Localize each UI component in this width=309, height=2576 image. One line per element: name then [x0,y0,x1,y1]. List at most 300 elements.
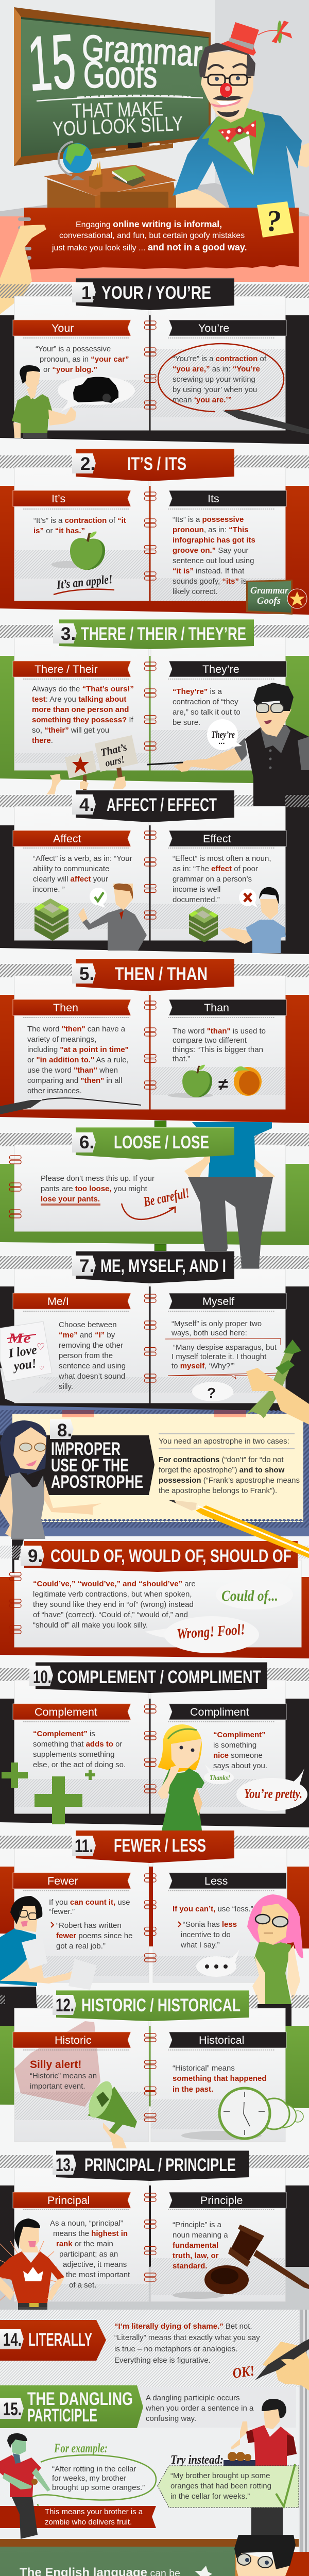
right text: “Principle” is a [173,2221,222,2229]
right text: be sure. [173,718,200,727]
heading banner [72,790,234,822]
pen with line [0,1098,141,1114]
title: 15 Grammar Goofs: Goofs [83,55,157,96]
left text: clearly will affect your [33,875,108,884]
left text: sentence and using [59,1362,126,1370]
left text: else, or the act of doing so. [33,1760,126,1769]
right text: incentive to do [181,1930,231,1939]
ribbon: Than: Than [204,1002,229,1014]
hand with pen [255,2339,309,2391]
notebook pages [14,1849,287,1982]
heading banner: 11. [75,1836,93,1856]
description text: when you order a sentence in a [145,2404,254,2413]
body text: “Literally” means that exactly what you say [114,2333,260,2342]
hatch strip [0,2155,309,2168]
right text [173,854,271,904]
asparagus in hand [246,1340,309,1425]
left text: Always do the “That’s ours!” [32,685,134,693]
right text: infographic has got its [173,536,255,545]
colour band [0,825,309,954]
bubble: you're pretty [236,1768,307,1811]
right text: “Its” is a possessive [173,515,244,524]
right text: documented.” [173,895,220,904]
section 15: dangling participle [0,2385,299,2540]
binder rings [144,831,156,919]
speech bubble: they're: ... [218,737,225,746]
corrected text [170,2471,271,2501]
heading banner: YOUR / YOU’RE [101,283,211,303]
ribbon: Less [169,1873,286,1889]
right text [173,354,267,404]
ribbon: Compliment [169,1704,286,1720]
left text: If you can count it, use [49,1898,130,1907]
heading banner [29,1662,267,1693]
ribbon: Effect: Effect [203,833,231,845]
notebook pages [14,1680,285,1814]
ribbon: Complement [13,1704,131,1720]
right text: The word "than" is used to [173,1027,266,1036]
worried man with oranges [224,2399,297,2540]
ribbon: There / Their: There / Their [35,663,98,675]
heading banner: AFFECT / EFFECT [107,795,217,815]
orange frame [235,2547,242,2576]
right text: in the past. [173,2085,213,2094]
description text [145,2394,254,2423]
binder rings [144,2033,156,2122]
raised hands with signs: ours! [104,754,126,769]
grey description band [137,2387,296,2428]
heading banner: 12. [56,1995,74,2015]
dashed rules [23,337,274,338]
right text: If you can’t, use “less.” [173,1905,253,1913]
man losing pants [184,1122,275,1269]
dashed rules [23,1017,274,1018]
binder rings [144,1294,156,1382]
colour band [0,1164,309,1245]
example text: “After rotting in the cellar [52,2465,136,2473]
dashed rules [23,848,274,849]
ribbon: You're: You’re [198,322,229,334]
heading text [51,1439,143,1492]
ribbon: Me/I: Me/I [47,1295,69,1308]
heading banner [72,1251,234,1283]
ribbon: Me/I [13,1293,131,1309]
plus signs [2,1762,95,1824]
heading banner [72,959,234,991]
ribbon: Its [169,490,286,506]
left text: rank or the main [56,2240,113,2248]
body text: “should of” all make you look silly. [33,1621,148,1630]
notebook pages [14,2008,285,2142]
left text: what doesn’t sound [58,1372,125,1381]
chalkboard [14,7,211,166]
dashed green box [158,2466,299,2507]
heading label: PARTICIPLE [27,2405,97,2426]
binding strip [299,2310,309,2552]
ribbon: It's: It’s [52,493,65,505]
ribbon: They're [169,661,286,677]
pants under page [0,2004,291,2026]
body text: “I’m literally dying of shame.” Bet not. [114,2322,252,2331]
speech bubble: they're: They’re [211,730,235,740]
right text: “Compliment” [213,1731,266,1739]
left text: “Affect” is a verb, as in: “Your [33,854,132,863]
icon: books [112,165,146,187]
left text: fewer poems since he [56,1931,132,1940]
check bubble [90,888,107,908]
hand holding paper [0,225,46,314]
heading label: 14. [3,2330,22,2350]
script: for example: For example: [54,2442,108,2455]
heading banner [72,449,234,481]
ribbon: Fewer [13,1873,131,1889]
binder rings [18,217,31,260]
left text: test: Are you talking about [32,695,126,704]
notebook pages [14,637,285,770]
ribbon text: This means your brother is a [45,2507,143,2516]
heading text: USE OF THE [51,1455,129,1476]
colour band [0,2026,309,2108]
bubble: thanks [204,1765,234,1784]
heading banner: 9. [28,1546,43,1566]
intro section [0,201,309,314]
left text: income. ” [33,885,65,894]
left text: “fewer.” [49,1907,75,1916]
right text: are,” so talk it out to [173,708,241,717]
apostrophe text [159,1455,300,1495]
title: 15 Grammar Goofs: 15 [25,18,78,107]
heading banner: PRINCIPAL / PRINCIPLE [84,2155,236,2175]
dashed rules [23,2209,274,2210]
left text: “Your” is a possessive [36,345,111,353]
notebook pages [14,1269,285,1403]
left text [33,854,132,894]
body text: pants are too loose, you might [41,1184,148,1193]
teacher desk [44,165,178,211]
underline [41,1204,100,1205]
right text: sentence out loud using [173,556,254,565]
right text: “you are,” as in: “You’re [173,365,260,374]
heading banner [53,1990,249,2021]
apostrophe text: possession (“Frank’s apostrophe means [159,1476,300,1485]
ribbon: Historical [169,2032,286,2048]
wooden ledge [0,2539,299,2547]
star badge [287,589,307,608]
dashed rules [23,509,274,510]
cross bubble [239,889,258,908]
black heading label [0,1435,154,1495]
right text: noun meaning a [173,2231,228,2240]
ribbon: Fewer: Fewer [47,1875,78,1887]
section 4: affect / effect [0,790,309,954]
bubble: thanks: Thanks! [210,1774,230,1782]
right text [173,2221,228,2270]
right text: “Myself” is only proper two [171,1319,262,1328]
rules [159,1434,295,1449]
icon: pencil cup [89,161,102,190]
megaphone beam [14,2021,100,2107]
heading banner [53,619,254,649]
right text [173,1905,253,1950]
ribbon: Principle [169,2192,286,2208]
intro text [52,219,247,252]
chalkboard [0,2547,236,2576]
right text: things: “This is bigger than [173,1045,263,1054]
clocks [181,2088,303,2140]
body text: they sound like they end in “of” (wrong) instead [33,1600,194,1609]
ribbon: Effect [169,831,286,846]
apostrophe text: For contractions (“don’t” for “do not [159,1455,284,1464]
right text: that.” [173,1055,190,1063]
right text: “Sonia has less [183,1920,237,1929]
icon: apple not equal orange: ≠ [218,1075,228,1094]
script: it's an apple: It’s an apple! [56,573,113,592]
note cards: me, I love you: Me [8,1331,31,1346]
left text: Choose between [59,1320,117,1329]
ribbon: They're: They’re [202,663,239,675]
right text [173,687,241,727]
right text [173,515,255,596]
right text: contraction of “they [173,698,238,706]
dark hatching [0,1410,309,1528]
left text: more than one person and [32,705,129,714]
red circled annotation [158,344,284,412]
left text: including "at a point in time" [27,1045,129,1054]
left text: The word "then" can have a [27,1025,126,1033]
heading banner: THERE / THEIR / THEY’RE [81,624,246,644]
section 13: principal / principle [0,2150,309,2313]
right text: pronoun, as in: “This [173,526,249,534]
title: that make you look silly: THAT MAKE [72,97,164,123]
note cards: me, I love you [0,1321,52,1403]
colour bands [0,1867,309,1948]
apostrophe text: the apostrophe belongs to Frank”). [159,1486,277,1495]
ribbon: Its: Its [208,493,219,505]
right text: “You’re” is a contraction of [173,354,267,363]
left text: silly. [59,1382,73,1391]
left text: of a set. [69,2281,96,2290]
corrected text: in the cellar for weeks.” [170,2492,250,2501]
hatch strip [0,1836,309,1849]
hatch strip [0,1546,309,1558]
body text: Everything else is figurative. [114,2356,211,2365]
body text: Please don’t mess this up. If your [41,1174,154,1183]
right text: standard. [173,2262,208,2270]
left text: there. [32,736,53,745]
colour band [0,1286,309,1412]
classroom walls [0,0,309,219]
notebook page [14,1560,301,1647]
notebook pages [14,976,285,1109]
left text: removing the other [59,1341,123,1350]
ribbon: Principle: Principle [200,2194,243,2207]
title: 15 Grammar Goofs: Grammar [81,27,203,74]
binder rings [144,662,156,750]
pen [222,410,309,434]
sticky note with question mark: ? [266,204,281,238]
left text: “me” and “I” by [59,1331,115,1340]
colour band [0,1699,309,1827]
title: that make you look silly [52,97,183,141]
left text [30,2059,97,2091]
body text [33,1580,196,1630]
speech bubble with car [58,376,135,412]
raised hands with signs: That’s [99,741,128,759]
quote text: I myself tolerate it. I thought [171,1352,267,1361]
right text: ways, both used here: [171,1329,247,1337]
left text: “Complement” is [33,1730,95,1738]
ribbon: Less: Less [204,1875,228,1887]
hatch strip [0,625,309,638]
boy in blue shirt [220,887,286,953]
mini chalkboard: grammar goofs: Grammar [250,585,289,596]
sticky note with question mark [257,201,294,238]
right text: “it is” instead. If that [173,567,245,575]
left text: adjective, it means [63,2260,127,2269]
hatch strip [0,455,309,468]
right text: grammar on a person’s [173,875,252,884]
section 14: literally [0,2310,309,2552]
heading label: LITERALLY [28,2330,92,2350]
heading banner: 3. [61,624,76,644]
right text: “Effect” is most often a noun, [173,854,271,863]
section 7: me, myself, and I [0,1251,309,1412]
ribbon: Your [13,320,131,336]
curved arrow [122,1204,175,1219]
left text [33,516,126,535]
left text: other instances. [27,1087,82,1095]
binder rings [144,321,156,409]
left text: something that adds to or [33,1740,122,1749]
title: that make you look silly: YOU LOOK SILLY [52,112,183,141]
section 6: loose / lose [0,1121,309,1269]
raised hands with signs [46,735,138,794]
bubble: wrong fool [145,1616,259,1653]
description text: confusing way. [146,2414,196,2423]
chalk stroke [37,95,203,101]
ribbon: Affect [13,831,131,846]
script: OK: OK! [232,2363,256,2382]
ribbon: Than [169,999,286,1015]
colour band [0,486,309,615]
title: 15 Grammar Goofs [25,18,203,107]
binder rings [144,1874,156,1962]
ribbon: Affect: Affect [53,833,81,845]
left text: means the highest in [53,2229,128,2238]
green loop with arrow [28,2455,156,2513]
left text: pronoun, as in “your car” [40,355,129,364]
body text: lose your pants. [41,1195,100,1204]
corrected text: “My brother brought up some [170,2471,270,2480]
ribbon text: zombie who delivers fruit. [45,2518,132,2527]
heading banner: THEN / THAN [115,964,208,984]
binder rings [9,1156,21,1218]
ribbon: It's [13,490,131,506]
icon: apple not equal orange [168,1065,262,1098]
heading banner: 10. [33,1667,52,1687]
man in red crown shirt [0,2218,64,2312]
section 5: then / than [0,959,309,1123]
heading text: IMPROPER [51,1439,121,1459]
right text: likely correct. [173,587,218,596]
intro text: Engaging online writing is informal, [76,219,222,229]
quote box [165,1338,281,1379]
icon: globe [59,142,92,180]
dashed rules [23,679,274,680]
question bubble: ? [207,1385,216,1401]
right text: compare two different [173,1036,247,1045]
boy in green shirt [12,365,76,439]
colour band [0,1577,309,1658]
heading banner [21,1541,298,1572]
intro text: just make you look silly ... and not in a good way. [52,242,247,252]
note cards: me, I love you: ♡ [37,1342,45,1352]
note cards: me, I love you: I love [7,1343,38,1361]
hatch strip [0,284,309,298]
right text [213,1731,267,1770]
section 9: could of, would of, should of [0,1500,309,1658]
left text: variety of meanings, [27,1035,96,1044]
right text: groove on.” Say your [173,546,249,555]
blue background [0,1405,309,1536]
hatch strip [0,1133,309,1146]
right text: something that happened [173,2074,267,2083]
example text: brought up some oranges.” [52,2483,145,2492]
colour band [0,2185,309,2313]
heading label [0,2320,106,2361]
corrected text: oranges that had been rotting [170,2482,271,2490]
quote text: “Many despise asparagus, but [173,1343,277,1352]
right text: is something [213,1741,256,1750]
left text [58,1320,126,1391]
note cards: me, I love you: you! [11,1357,37,1374]
dashed rules [23,1890,274,1891]
left text: or “your blog.” [43,365,97,374]
dashed rules [23,1721,274,1722]
body text: “Could’ve,” “would’ve,” and “should’ve” are [33,1580,196,1588]
left text: comparing and "then" in all [27,1076,122,1085]
heading banner [72,1127,234,1160]
chalk stars [195,2566,212,2576]
background [0,2387,299,2539]
hatched paper [0,2310,299,2388]
man with paper [0,1896,97,2026]
left text: something they possess? If [32,716,134,724]
right text: mean ‘you are.’” [173,396,232,404]
ribbon: Then [13,999,131,1015]
cream note [12,1414,303,1522]
apostrophe text: forget the apostrophe”) and to show [159,1466,285,1475]
left text: “It’s” is a contraction of “it [33,516,126,525]
quote text: to myself, ‘Why?’” [171,1362,235,1370]
heading banner [72,1831,234,1863]
heading label [0,2385,143,2428]
icon: money stack [189,906,218,942]
torn red paper [24,208,299,269]
header classroom scene [0,0,309,219]
number tab [50,1419,74,1440]
section 1: your / you're [0,278,309,444]
ribbon: Complement: Complement [35,1706,97,1718]
left text: “Robert has written [56,1921,122,1930]
heading text: APOSTROPHE [51,1472,143,1492]
left text: ability to communicate [33,865,109,873]
quote text [171,1343,277,1370]
right text [173,2064,267,2094]
binder rings [144,1705,156,1793]
question bubble [192,1382,234,1401]
right text: “Historical” means [173,2064,235,2073]
